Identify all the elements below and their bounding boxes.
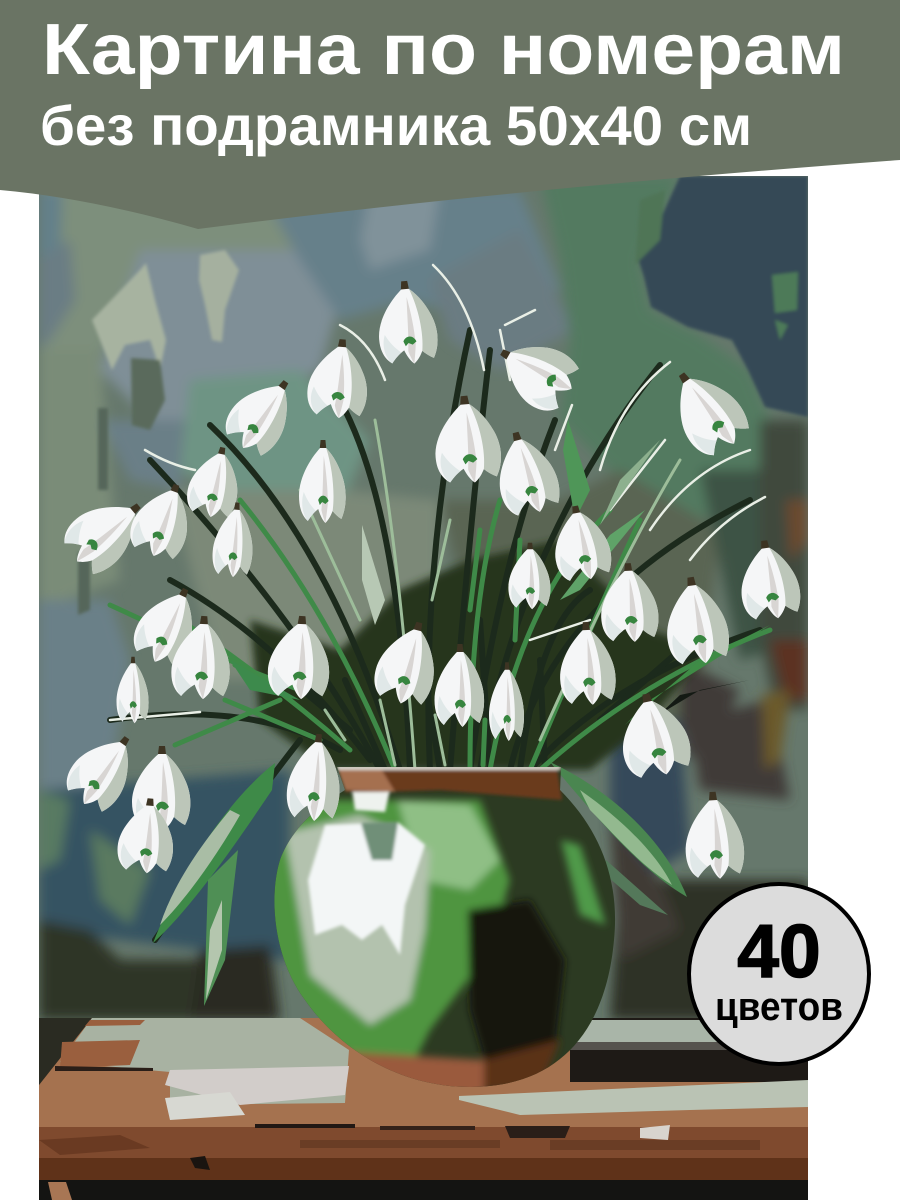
painting: snowdrops in a green vase xyxy=(39,176,808,1200)
title: Картина по номерам xyxy=(42,10,845,90)
bouquet stems and leaves xyxy=(110,265,770,940)
wooden table xyxy=(39,1018,808,1200)
painted background wall xyxy=(39,176,808,1018)
large drooping leaves xyxy=(153,420,770,1006)
subtitle: без подрамника 50х40 см xyxy=(40,94,752,157)
sage brush patches xyxy=(78,176,808,615)
header banner xyxy=(0,0,900,229)
green ceramic vase xyxy=(274,767,615,1087)
dark foliage mass xyxy=(250,540,710,770)
badge number: 40 xyxy=(737,909,821,993)
badge: 40 colours xyxy=(689,884,869,1064)
badge label: цветов xyxy=(715,985,843,1029)
snowdrop flowers xyxy=(56,279,803,880)
